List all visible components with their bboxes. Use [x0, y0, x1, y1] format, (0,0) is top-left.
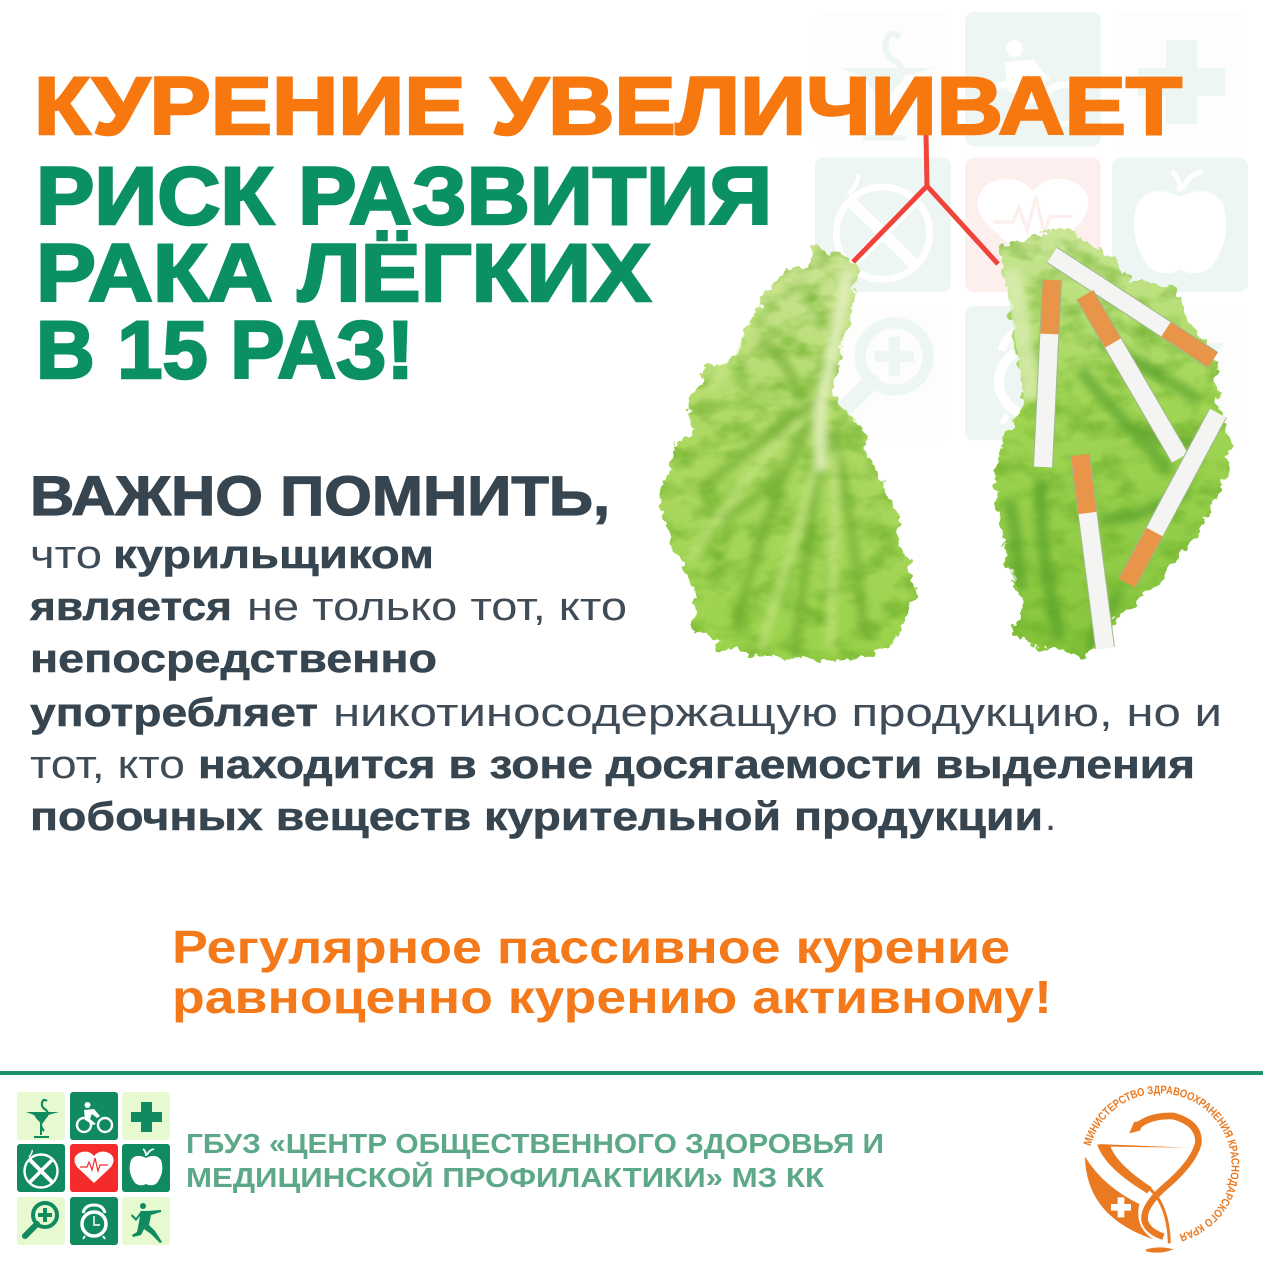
body text: употребляет — [30, 691, 318, 735]
cigarette 4 — [1127, 413, 1218, 583]
footer organisation name — [186, 1128, 884, 1193]
callout: passive smoking: равноценно курению активному! — [172, 971, 1052, 1023]
title: green lines: РИСК РАЗВИТИЯ — [36, 151, 772, 242]
body text — [29, 533, 1222, 839]
body text: что — [30, 533, 102, 577]
body text: курильщиком — [113, 533, 434, 577]
body text: непосредственно — [30, 637, 437, 681]
body text: никотиносодержащую продукцию, но и — [333, 691, 1222, 735]
title: green lines — [36, 151, 772, 396]
body text: побочных веществ курительной продукции — [30, 795, 1043, 839]
right lung leaf — [992, 227, 1232, 658]
background: faded medical icon tiles — [815, 12, 1248, 440]
cigarette 1 — [1052, 255, 1213, 360]
cigarette 2 — [1043, 280, 1052, 467]
callout: passive smoking — [172, 921, 1052, 1023]
footer logo: icon tiles — [17, 1092, 170, 1245]
illustration: lettuce lungs with cigarettes — [660, 134, 1232, 662]
title: green lines: В 15 РАЗ! — [36, 305, 414, 396]
body text: не только тот, кто — [247, 585, 627, 629]
title: orange line: КУРЕНИЕ УВЕЛИЧИВАЕТ — [34, 61, 1182, 152]
footer organisation name: ГБУЗ «ЦЕНТР ОБЩЕСТВЕННОГО ЗДОРОВЬЯ И — [186, 1128, 884, 1159]
left lung leaf — [660, 245, 918, 662]
body text: находится в зоне досягаемости выделения — [198, 743, 1195, 787]
bronchi: red straws — [853, 134, 998, 264]
title: green lines: РАКА ЛЁГКИХ — [36, 228, 651, 319]
body text: тот, кто — [30, 743, 185, 787]
cigarette 5 — [1080, 455, 1105, 648]
subheading: ВАЖНО ПОМНИТЬ, — [30, 464, 610, 527]
body text: . — [1045, 795, 1056, 839]
callout: passive smoking: Регулярное пассивное курение — [172, 921, 1010, 973]
ministry emblem: МИНИСТЕРСТВО ЗДРАВООХРАНЕНИЯ КРАСНОДАРСКОГО КРАЯ — [1083, 1086, 1240, 1242]
footer organisation name: МЕДИЦИНСКОЙ ПРОФИЛАКТИКИ» МЗ КК — [186, 1161, 825, 1193]
body text: является — [29, 585, 232, 629]
cigarette 3 — [1085, 295, 1180, 458]
